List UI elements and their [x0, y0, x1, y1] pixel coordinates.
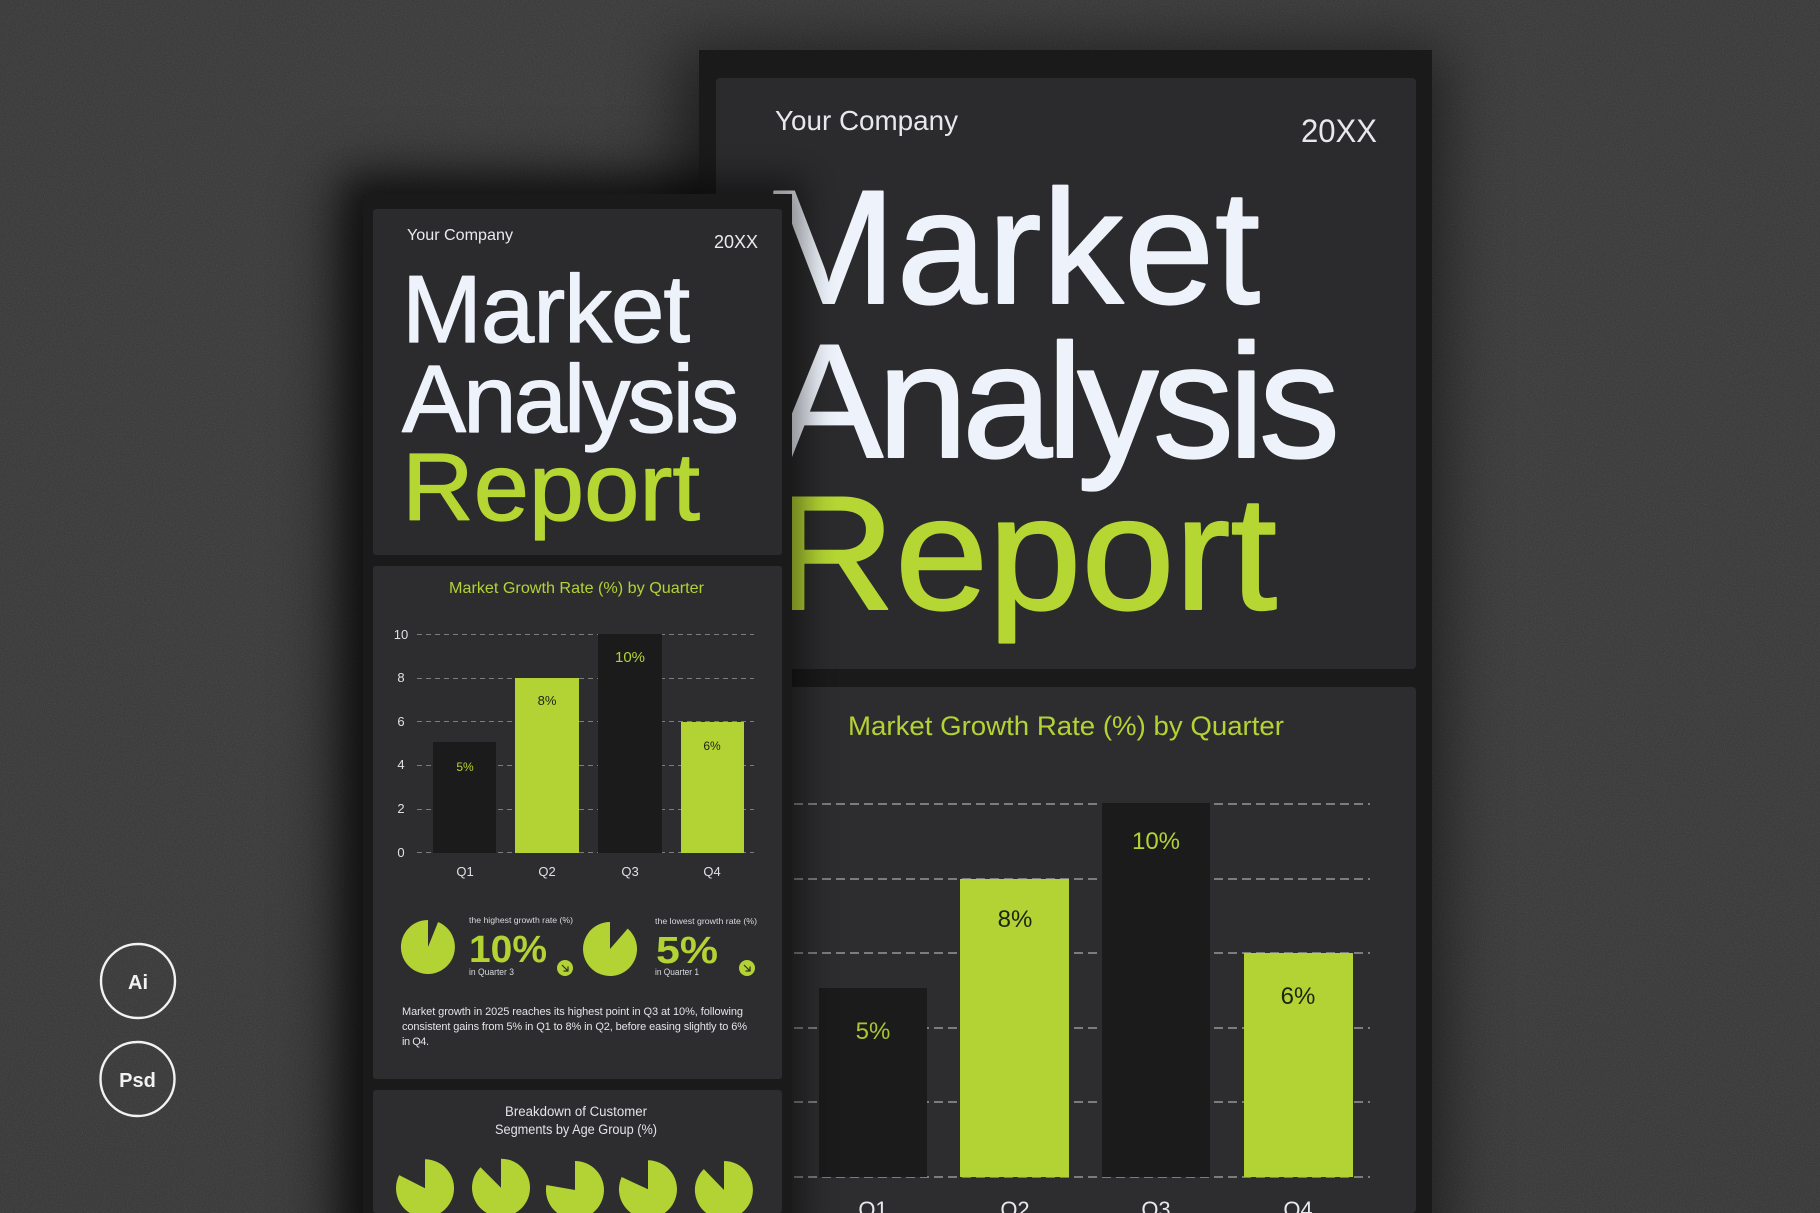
pie: highest	[401, 920, 455, 974]
front title: Market	[402, 256, 690, 363]
stat note: quarter 1: in Quarter 1	[655, 967, 699, 977]
back chart bars	[819, 803, 1353, 1177]
back title	[761, 157, 1340, 644]
panel: back page header	[716, 78, 1416, 669]
stat value: 5%: 5%	[656, 930, 718, 972]
bar value labels: 6%	[703, 739, 721, 753]
badge: Psd: Psd	[119, 1070, 156, 1092]
stat note: quarter 3: in Quarter 3	[469, 967, 514, 977]
y axis labels: 6	[397, 714, 405, 729]
stat: highest growth rate	[401, 915, 573, 977]
back chart value labels	[856, 828, 1315, 1045]
segments heading: Segments by Age Group (%)	[495, 1122, 657, 1137]
badge: Ai: Ai	[128, 972, 148, 994]
stat caption: highest: the highest growth rate (%)	[469, 915, 573, 925]
shadow of front page onto back page	[345, 178, 805, 1213]
back chart gridlines	[780, 804, 1370, 1177]
back chart value labels: 6%	[1281, 983, 1315, 1010]
y axis labels	[394, 627, 408, 860]
segments heading: Breakdown of Customer	[505, 1104, 647, 1119]
summary paragraph	[402, 1006, 747, 1048]
x axis labels: Q1	[456, 864, 474, 879]
back title: Report	[774, 463, 1277, 644]
stat value: 10%: 10%	[469, 929, 547, 971]
stat: lowest growth rate	[583, 916, 757, 977]
panel: back chart	[716, 687, 1416, 1213]
front title: Analysis	[402, 346, 739, 453]
panel: front chart and stats	[373, 566, 782, 1079]
y axis labels: 10	[394, 627, 408, 642]
back chart value labels: 5%	[856, 1018, 890, 1045]
panel: front page	[363, 194, 792, 1213]
panel: customer segments	[373, 1090, 782, 1213]
y axis labels: 4	[397, 757, 405, 772]
back title: Market	[761, 157, 1260, 338]
back chart value labels: 8%	[998, 906, 1032, 933]
y axis labels: 8	[397, 670, 405, 685]
icon: arrow badge	[557, 960, 573, 976]
front title: Report	[402, 434, 700, 541]
icon: arrow badge	[739, 960, 755, 976]
y axis labels: 0	[397, 845, 405, 860]
bars	[433, 634, 744, 853]
back company name: Your Company	[775, 105, 958, 136]
front title	[402, 256, 739, 541]
page shadows on background	[335, 46, 1446, 1213]
badge: Ai	[101, 944, 175, 1018]
summary paragraph: in Q4.	[402, 1036, 429, 1048]
panel: back page	[699, 50, 1432, 1213]
segments heading	[495, 1104, 657, 1137]
summary paragraph: consistent gains from 5% in Q1 to 8% in Q2, before easing slightly to 6%	[402, 1021, 747, 1033]
x axis labels	[456, 864, 721, 879]
x axis labels: Q2	[538, 864, 556, 879]
front company name: Your Company	[407, 227, 513, 244]
x axis labels: Q4	[703, 864, 721, 879]
x axis labels: Q3	[621, 864, 639, 879]
back chart axis labels	[858, 1197, 1313, 1213]
chart title: Market Growth Rate (%) by Quarter	[449, 580, 705, 597]
stat caption: lowest: the lowest growth rate (%)	[655, 916, 757, 926]
back title: Analysis	[775, 311, 1340, 492]
bar value labels: 8%	[538, 693, 557, 708]
badge: Psd	[100, 1042, 174, 1116]
bar value labels: 10%	[615, 649, 645, 666]
gridlines	[417, 634, 754, 852]
front year: 20XX	[714, 232, 758, 252]
y axis labels: 2	[397, 801, 405, 816]
back chart value labels: 10%	[1132, 828, 1180, 855]
bar value labels: 5%	[456, 760, 474, 774]
pie: lowest	[583, 922, 637, 976]
summary paragraph: Market growth in 2025 reaches its highest point in Q3 at 10%, following	[402, 1006, 743, 1018]
segment pies	[396, 1159, 753, 1213]
back year: 20XX	[1301, 113, 1377, 149]
panel: front header	[373, 209, 782, 555]
back chart title: Market Growth Rate (%) by Quarter	[848, 711, 1284, 741]
bar value labels	[456, 649, 721, 774]
